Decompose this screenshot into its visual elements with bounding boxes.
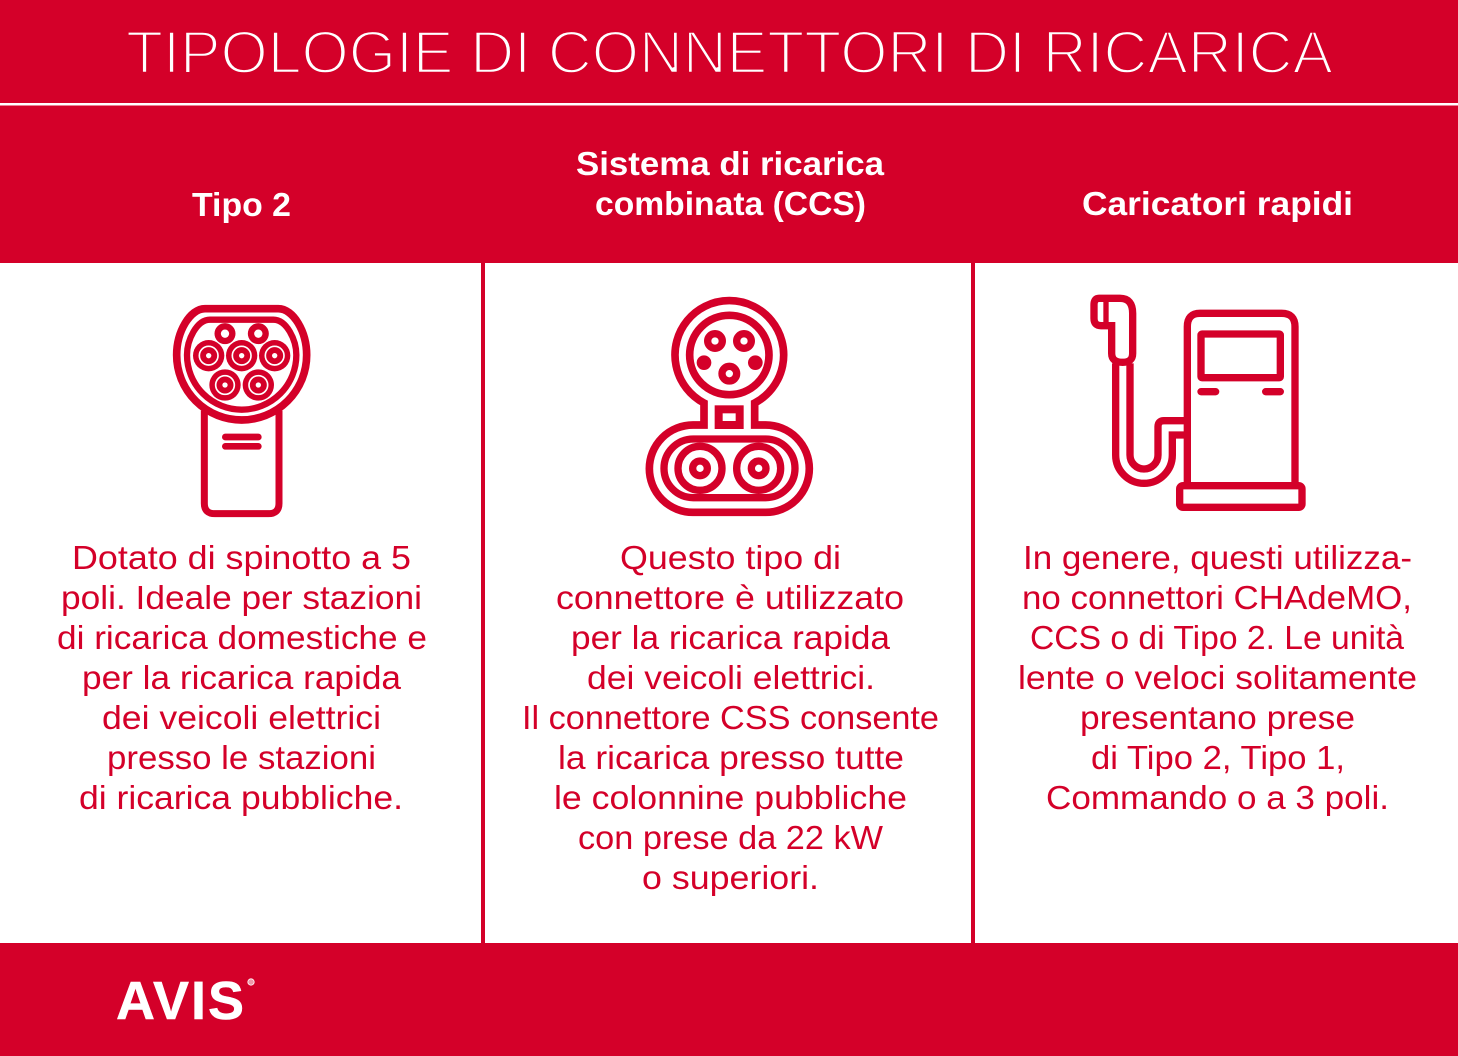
icon: type 2 connector: [177, 309, 307, 514]
text: fast chargers description: In genere, questi utilizza-: [1023, 539, 1412, 576]
text: Tipo 2 description: per la ricarica rapida: [82, 659, 402, 696]
heading: Sistema di ricarica combinata (CCS): Sistema di ricarica: [576, 145, 885, 182]
text: Tipo 2 description: [57, 539, 427, 816]
text: fast chargers description: presentano prese: [1080, 699, 1355, 736]
text: Tipo 2 description: presso le stazioni: [107, 739, 376, 776]
header band: [0, 0, 1458, 263]
text: fast chargers description: di Tipo 2, Tipo 1,: [1091, 739, 1345, 776]
text: CCS description: [522, 539, 939, 896]
heading: Sistema di ricarica combinata (CCS): combinata (CCS): [595, 185, 866, 222]
text: CCS description: dei veicoli elettrici.: [587, 659, 875, 696]
heading: Caricatori rapidi: Caricatori rapidi: [1082, 185, 1353, 222]
icon: charging station: [1094, 298, 1302, 507]
icon: CCS combo connector: [649, 301, 809, 512]
text: fast chargers description: CCS o di Tipo 2. Le unità: [1030, 619, 1405, 656]
title: TIPOLOGIE DI CONNETTORI DI RICARICA: [126, 19, 1333, 86]
text: Tipo 2 description: di ricarica pubbliche.: [79, 779, 403, 816]
text: Tipo 2 description: Dotato di spinotto a 5: [72, 539, 411, 576]
text: CCS description: connettore è utilizzato: [556, 579, 904, 616]
text: Tipo 2 description: poli. Ideale per stazioni: [61, 579, 422, 616]
footer band: [0, 943, 1458, 1056]
text: CCS description: per la ricarica rapida: [571, 619, 891, 656]
logo: AVIS: AVIS: [116, 971, 244, 1031]
text: CCS description: o superiori.: [642, 859, 819, 896]
text: Tipo 2 description: dei veicoli elettrici: [102, 699, 381, 736]
text: fast chargers description: [1018, 539, 1417, 816]
text: CCS description: le colonnine pubbliche: [554, 779, 907, 816]
heading: Sistema di ricarica combinata (CCS): [576, 145, 885, 222]
text: Tipo 2 description: di ricarica domestiche e: [57, 619, 427, 656]
text: CCS description: Il connettore CSS consente: [522, 699, 939, 736]
text: fast chargers description: no connettori CHAdeMO,: [1022, 579, 1412, 616]
text: fast chargers description: lente o veloci solitamente: [1018, 659, 1417, 696]
heading: Tipo 2: Tipo 2: [192, 186, 291, 223]
text: CCS description: con prese da 22 kW: [578, 819, 884, 856]
text: fast chargers description: Commando o a 3 poli.: [1046, 779, 1389, 816]
column dividers: [481, 263, 975, 943]
text: CCS description: Questo tipo di: [620, 539, 841, 576]
text: CCS description: la ricarica presso tutte: [558, 739, 904, 776]
